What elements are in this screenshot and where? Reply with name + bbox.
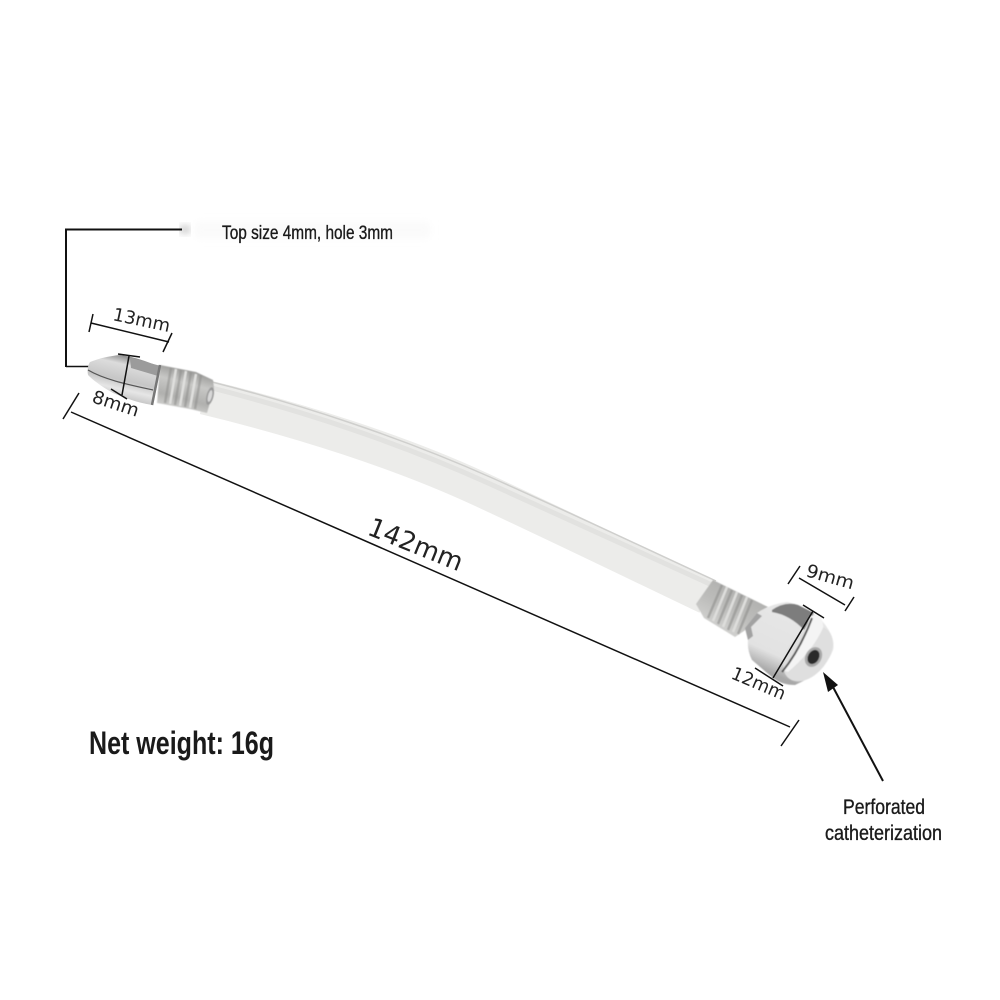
dimension: 8mm: [89, 354, 142, 422]
dimension: 8mm: 8mm: [89, 387, 142, 422]
label: perforated catheterization: Perforated: [843, 796, 925, 819]
label: perforated catheterization: catheterization: [825, 822, 942, 845]
dimension: 142mm: 142mm: [363, 513, 467, 578]
icon: end hole: [801, 644, 826, 670]
label: perforated catheterization: [825, 796, 942, 845]
metal tip: [88, 355, 161, 405]
net weight: Net weight: 16g: [89, 725, 274, 761]
dimension: 13mm: 13mm: [111, 304, 172, 337]
callout: top size: Top size 4mm, hole 3mm: [222, 223, 393, 244]
arrow: hole pointer: [823, 672, 883, 781]
dimension: 12mm: 12mm: [728, 663, 789, 705]
dimension: 12mm: [728, 605, 824, 705]
callout: top size: [66, 222, 430, 367]
dimension: 9mm: [788, 561, 857, 611]
threaded end connector: [696, 580, 768, 637]
threaded tip connector: [157, 365, 216, 413]
dimension: 9mm: 9mm: [804, 561, 857, 594]
catheter tube: [204, 381, 716, 597]
dimension: 142mm: [63, 393, 799, 746]
dimension: 13mm: [89, 304, 172, 352]
metal end cap: [745, 602, 843, 691]
